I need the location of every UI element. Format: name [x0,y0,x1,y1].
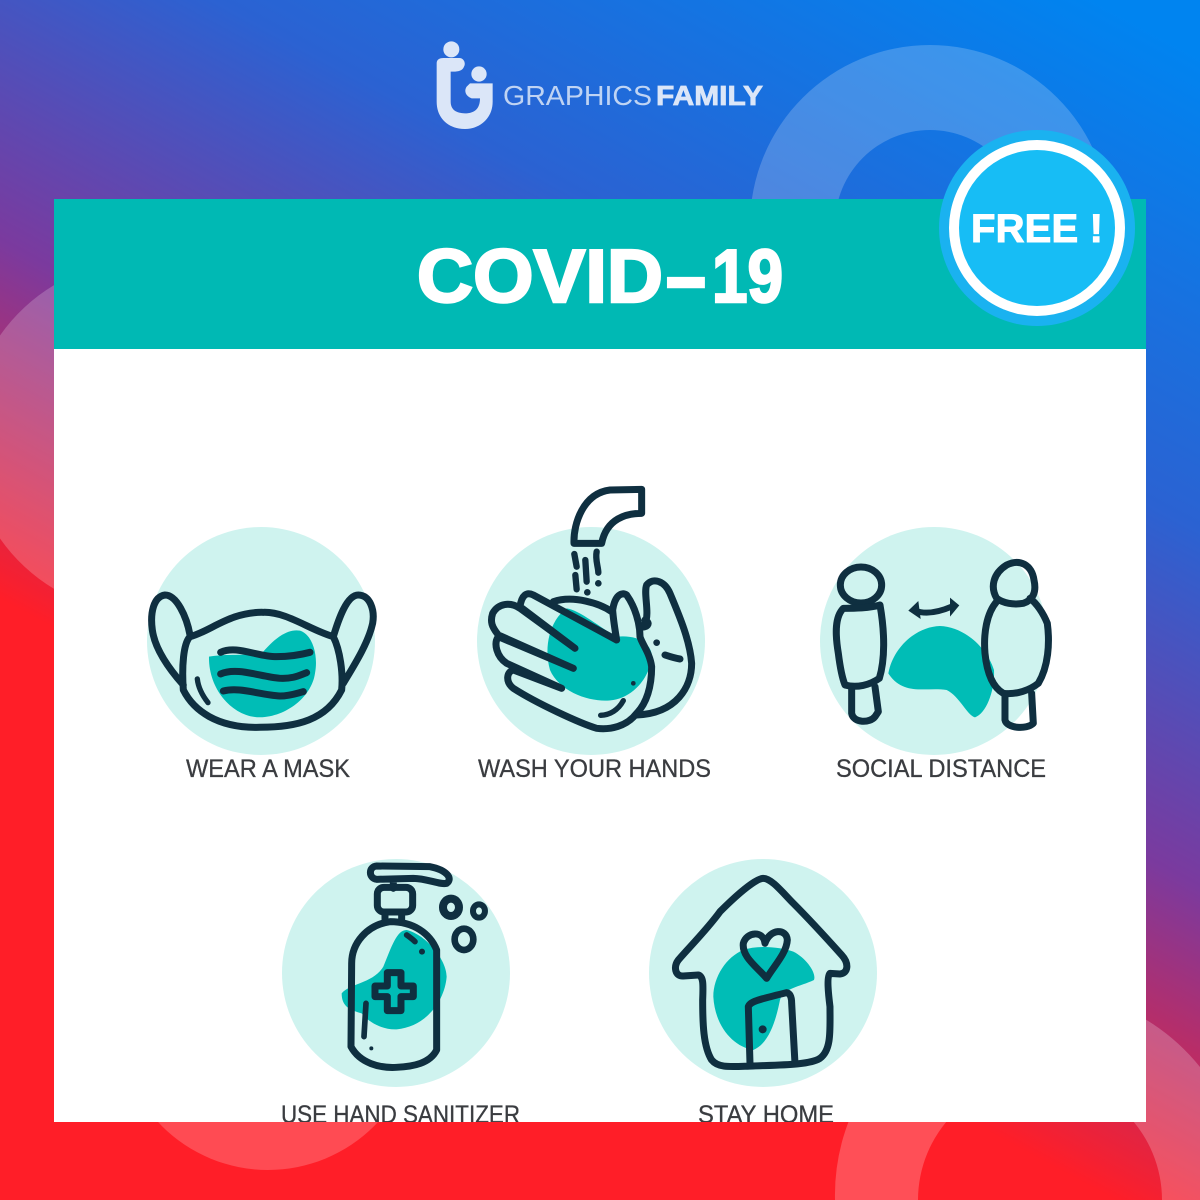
item: social distance [820,527,1048,783]
panel: white card [54,199,1146,1122]
badge text: FREE ! [971,207,1103,251]
decorative ring: top right [750,45,1110,405]
item: use hand sanitizer [281,859,520,1129]
decorative circle: left [0,260,322,614]
label: STAY HOME [698,1101,834,1129]
header band [54,199,1146,349]
label: WEAR A MASK [186,755,350,783]
item: wear a mask [147,527,375,783]
icon: two people [820,527,1048,755]
label: WASH YOUR HANDS [478,755,711,783]
icon: sanitizer bottle [282,859,510,1087]
arrow: distance [908,598,959,619]
logo: GraphicsFamily [437,41,763,129]
badge: free [939,130,1135,326]
item: stay home [649,859,877,1129]
icon: hands and faucet [477,489,705,755]
item: wash your hands [477,489,711,783]
decorative ring: bottom right [835,990,1200,1200]
title: COVID [417,234,663,318]
title: - [664,234,708,318]
logo wordmark: FAMILY [656,80,763,111]
title: 19 [712,234,783,318]
icon: mask [147,527,375,755]
decorative circle: bottom left [118,870,418,1170]
icon: house [649,859,877,1087]
logo mark [437,41,493,129]
label: USE HAND SANITIZER [281,1101,520,1129]
label: SOCIAL DISTANCE [836,755,1046,783]
logo wordmark: GRAPHICS [503,80,652,111]
